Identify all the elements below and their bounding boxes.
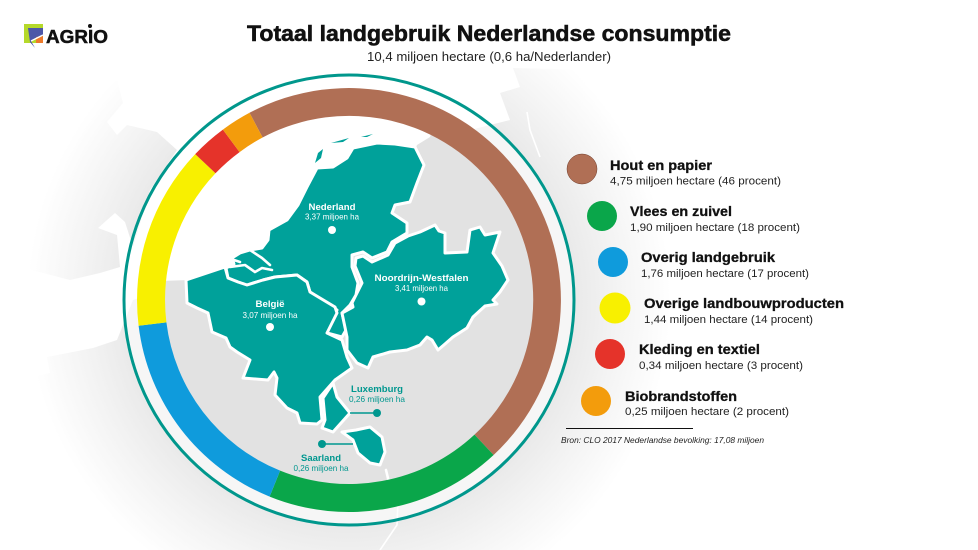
logo: Agrio bbox=[24, 24, 108, 48]
label: Saarland bbox=[294, 440, 353, 473]
segment: Vlees en zuivel bbox=[270, 435, 494, 512]
legend: Biobrandstoffen: 0,25 miljoen hectare (2 procent) bbox=[625, 406, 789, 418]
label: België bbox=[242, 299, 298, 331]
legend: Biobrandstoffen: Biobrandstoffen bbox=[625, 388, 737, 404]
legend: Overige landbouwproducten bbox=[600, 292, 844, 326]
label: Luxemburg: Luxemburg bbox=[351, 384, 403, 395]
segment: Overige landbouwproducten bbox=[137, 154, 216, 326]
background map: faded land bbox=[0, 68, 720, 550]
map: Saarland bbox=[342, 427, 385, 465]
label: België: België bbox=[256, 299, 284, 310]
label: Noordrijn-Westfalen: 3,41 miljoen ha bbox=[395, 283, 448, 293]
legend: Vlees en zuivel: Vlees en zuivel bbox=[630, 203, 732, 219]
legend: Hout en papier: Hout en papier bbox=[610, 157, 713, 173]
map: Luxemburg bbox=[322, 383, 350, 432]
segment: Biobrandstoffen bbox=[223, 113, 263, 152]
legend: Hout en papier: 4,75 miljoen hectare (46 procent) bbox=[610, 176, 781, 188]
grey land disc bbox=[164, 115, 534, 485]
legend: Kleding en textiel: Kleding en textiel bbox=[639, 341, 760, 357]
legend: Hout en papier bbox=[567, 154, 781, 188]
legend: Overig landgebruik: Overig landgebruik bbox=[641, 249, 775, 265]
legend: Vlees en zuivel bbox=[587, 201, 800, 234]
segment: Hout en papier bbox=[250, 88, 561, 455]
white sea bbox=[166, 116, 430, 281]
title: Totaal landgebruik Nederlandse consumptie bbox=[247, 21, 731, 46]
legend: Overige landbouwproducten: 1,44 miljoen hectare (14 procent) bbox=[644, 314, 813, 326]
legend: Kleding en textiel: 0,34 miljoen hectare (3 procent) bbox=[639, 360, 803, 372]
map: Wadden islands bbox=[315, 134, 373, 163]
legend: Vlees en zuivel: 1,90 miljoen hectare (18 procent) bbox=[630, 222, 800, 234]
map: België bbox=[186, 267, 352, 424]
outer teal ring bbox=[124, 75, 574, 525]
map: Noordrijn-Westfalen bbox=[342, 225, 508, 368]
legend: Biobrandstoffen bbox=[581, 386, 789, 418]
source note: Bron: CLO 2017 Nederlandse bevolking: 17,08 miljoen bbox=[561, 436, 765, 445]
label: Nederland: Nederland bbox=[308, 202, 356, 213]
legend: Overig landgebruik: 1,76 miljoen hectare (17 procent) bbox=[641, 268, 809, 280]
map disc with countries bbox=[165, 134, 534, 484]
label: Nederland bbox=[305, 202, 359, 234]
label: België: 3,07 miljoen ha bbox=[242, 310, 298, 320]
label: Saarland: 0,26 miljoen ha bbox=[294, 463, 349, 473]
map: Nederland bbox=[226, 143, 424, 337]
label: Luxemburg: 0,26 miljoen ha bbox=[349, 394, 405, 404]
donut chart: land use bbox=[137, 88, 561, 512]
label: Luxemburg bbox=[349, 384, 405, 417]
label: Noordrijn-Westfalen: Noordrijn-Westfalen bbox=[374, 273, 469, 284]
legend: Kleding en textiel bbox=[595, 339, 803, 372]
subtitle: 10,4 miljoen hectare (0,6 ha/Nederlander) bbox=[367, 50, 611, 64]
logo: Agrio: AGRIO bbox=[46, 27, 108, 47]
map: rivers and border lines bbox=[229, 250, 390, 480]
segment: Overig landgebruik bbox=[139, 322, 280, 497]
legend: Overige landbouwproducten: Overige landbouwproducten bbox=[644, 295, 844, 311]
label: Nederland: 3,37 miljoen ha bbox=[305, 212, 359, 222]
legend: Overig landgebruik bbox=[598, 247, 809, 280]
label: Saarland: Saarland bbox=[301, 453, 341, 464]
segment: Kleding en textiel bbox=[195, 130, 240, 173]
label: Noordrijn-Westfalen bbox=[374, 273, 469, 306]
